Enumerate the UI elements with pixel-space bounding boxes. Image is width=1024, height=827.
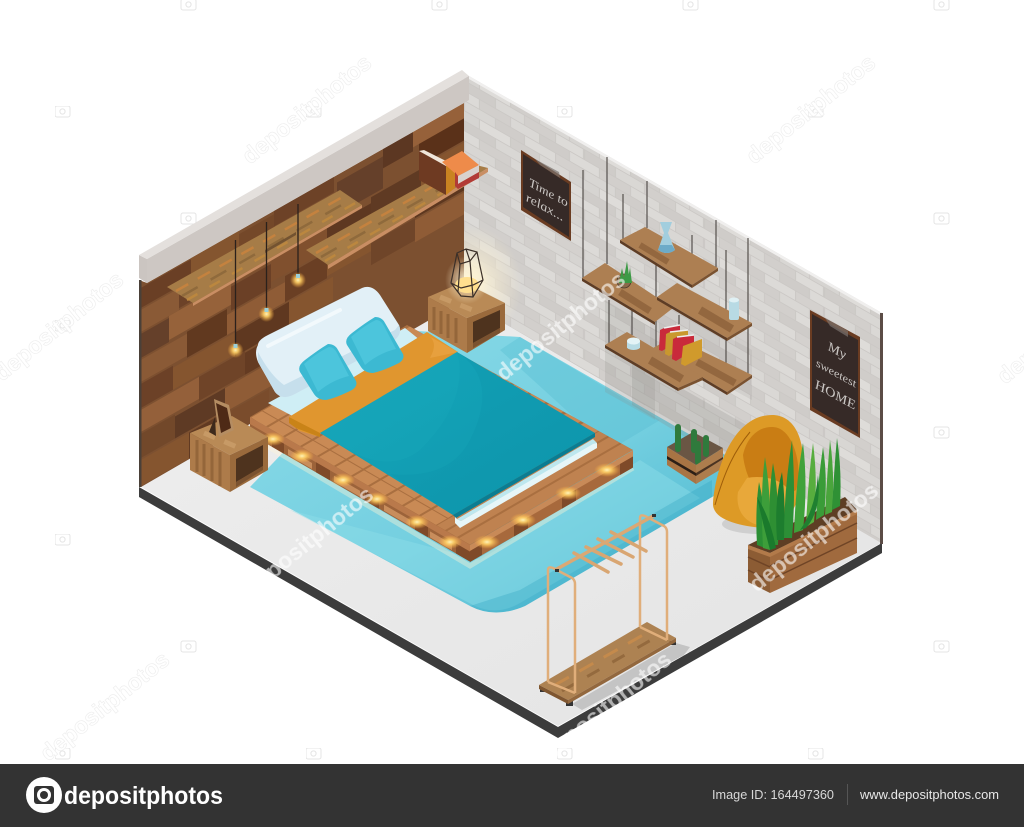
watermarks on white background: depositphotos xyxy=(237,49,376,169)
picture frame xyxy=(209,399,234,437)
chalkboard: My sweetest HOME: HOME xyxy=(814,376,855,414)
books on shelf xyxy=(419,150,479,195)
shelf D xyxy=(605,332,703,391)
watermarks over the room: depositphotos xyxy=(239,481,378,601)
shelf A xyxy=(620,227,718,288)
wall left edge xyxy=(139,280,142,487)
cactus crate xyxy=(667,427,723,484)
large white pillow xyxy=(256,287,400,397)
planter box with plant xyxy=(748,438,857,593)
right brick wall xyxy=(418,76,883,544)
wall shelf: right floating shelf with books xyxy=(306,150,488,269)
footer brand name: depositphotos xyxy=(64,782,223,810)
planter soil and back xyxy=(748,497,857,553)
bed lights xyxy=(261,432,620,549)
teal cushion right xyxy=(346,317,404,373)
pallet top xyxy=(250,325,633,545)
teal cushion left xyxy=(299,344,356,400)
floor xyxy=(141,300,881,726)
footer logo icon xyxy=(26,777,62,813)
image id: Image ID: 164497360 xyxy=(712,787,834,802)
rack shadow xyxy=(572,643,690,710)
red and yellow books xyxy=(659,325,702,366)
footer bar xyxy=(0,764,1024,827)
rack base board xyxy=(539,622,676,700)
watermarks over the room: depositphotos xyxy=(491,266,630,386)
chalkboard: My sweetest HOME xyxy=(810,310,860,438)
right pallet side xyxy=(470,450,633,562)
nightstand right xyxy=(428,282,505,353)
mattress sheet xyxy=(268,328,420,420)
cup xyxy=(729,298,739,320)
rack wheels xyxy=(540,641,676,706)
chalkboard: Time to relax xyxy=(521,150,571,241)
long planks at foot xyxy=(437,431,633,545)
shelf E xyxy=(653,337,752,395)
small potted plant xyxy=(617,261,632,288)
left pallet side xyxy=(250,417,470,562)
rug xyxy=(250,330,755,612)
plant blades xyxy=(756,438,841,550)
round white box xyxy=(627,338,640,350)
glow under bed xyxy=(250,436,633,566)
chalkboard: Time to relax: relax... xyxy=(526,190,563,225)
left wood-panel wall xyxy=(130,90,470,490)
lamp xyxy=(445,249,489,304)
hanging wall shelves xyxy=(582,157,752,395)
teal blanket xyxy=(320,352,597,528)
top wall cap xyxy=(139,70,469,283)
pendant lights xyxy=(228,204,306,358)
website: www.depositphotos.com xyxy=(859,787,999,802)
chalkboard: My sweetest HOME: sweetest xyxy=(816,356,856,391)
tiled left edge xyxy=(251,323,633,545)
nightstand left xyxy=(190,416,268,492)
watermarks over the room xyxy=(239,266,883,766)
rack frame xyxy=(548,515,667,693)
hangers xyxy=(574,532,646,572)
wall shelf: left floating shelf xyxy=(167,190,362,306)
glass vase xyxy=(658,222,675,253)
pallet bed frame xyxy=(250,323,633,566)
chalkboard: Time to relax: Time to xyxy=(529,176,568,211)
egg chair xyxy=(713,415,803,534)
tiled back edge xyxy=(404,324,599,437)
chalkboard: My sweetest HOME: My xyxy=(827,338,846,364)
watermarks over the room: depositphotos xyxy=(744,477,883,597)
clothes rack xyxy=(539,514,690,710)
watermarks on white background: depositphotos xyxy=(35,646,174,766)
shelf B xyxy=(582,263,673,325)
shelf wires xyxy=(583,157,748,390)
watermarks on white background: depositphotos xyxy=(741,49,880,169)
watermarks over the room: depositphotos xyxy=(537,646,676,766)
orange throw xyxy=(289,332,458,437)
shelf C xyxy=(657,283,752,341)
room base slab xyxy=(139,487,882,738)
